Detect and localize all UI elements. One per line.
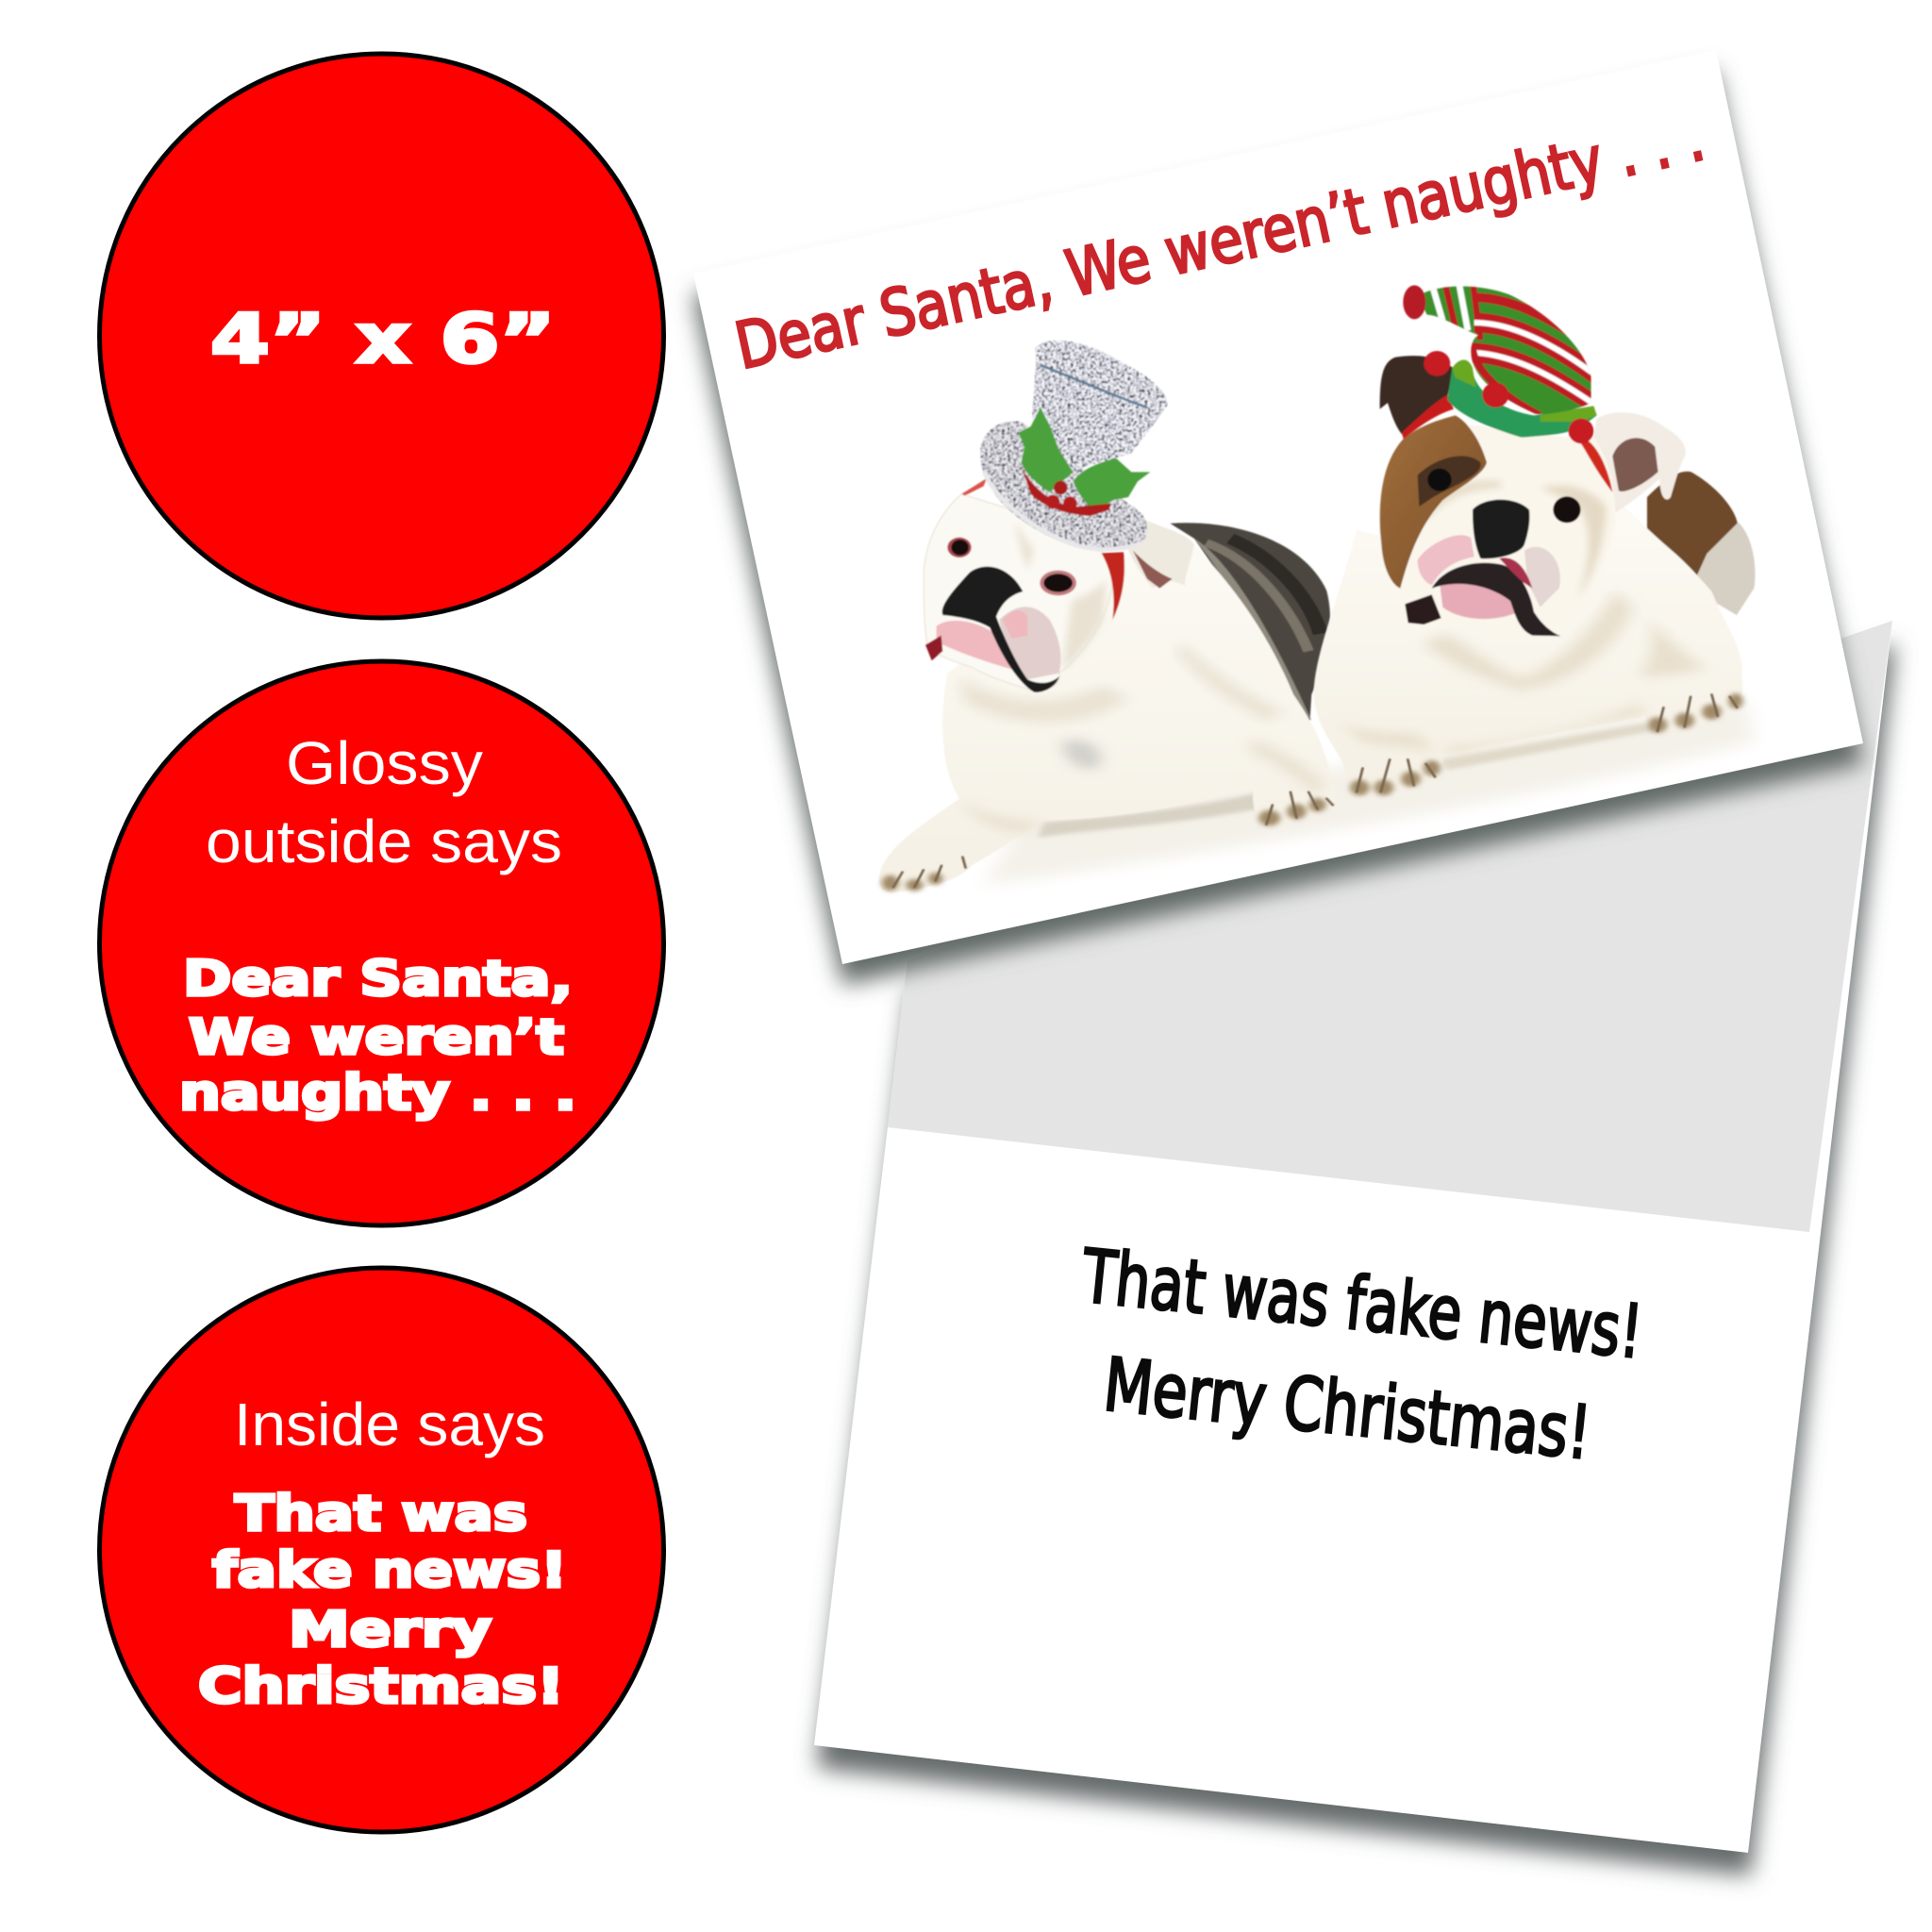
- inside message text: That was fake news!: [1077, 1234, 1646, 1375]
- left dog nose and mouth: [942, 567, 1059, 692]
- top hat: [980, 341, 1168, 551]
- right dog muzzle: [1418, 535, 1474, 585]
- brown face patch: [1380, 415, 1487, 589]
- dark far ear: [1380, 356, 1454, 436]
- inside message text: [1077, 1234, 1646, 1476]
- left dog muzzle: [937, 621, 1015, 670]
- hat tip stripes: [1432, 280, 1480, 340]
- left dog face shading: [1015, 523, 1107, 670]
- right dog face shading: [1421, 481, 1607, 598]
- inside label: Inside says: [234, 1391, 545, 1458]
- right dog nose and mouth: [1473, 500, 1529, 558]
- circle: inside says: [100, 1268, 664, 1832]
- inside message: That was: [235, 1486, 527, 1542]
- inside message: Merry: [289, 1602, 491, 1658]
- right dog head: [1380, 280, 1686, 636]
- fold: grey upper panel: [888, 621, 1892, 1232]
- dog: left bulldog with top hat: [879, 341, 1336, 892]
- left dog ear: [1128, 519, 1194, 589]
- outside label: [206, 729, 562, 875]
- right red bands: [1402, 395, 1454, 439]
- right dog ear: [1593, 412, 1686, 513]
- hat main stripes: [1468, 297, 1597, 415]
- front headline: Dear Santa, We weren’t naughty . . .: [729, 101, 1711, 385]
- holly leaves: [1018, 408, 1074, 492]
- left dog fur shading: [959, 642, 1326, 833]
- outside message: [179, 951, 576, 1122]
- left dog head: [924, 341, 1194, 692]
- photo: floor shadow: [984, 703, 1754, 885]
- left dog eyes: [947, 538, 972, 558]
- front of card: [693, 50, 1863, 985]
- red ribbon and berries: [1022, 466, 1111, 516]
- left dog body: [879, 523, 1336, 892]
- circle: size 4 x 6: [100, 54, 664, 618]
- outside message: naughty . . .: [179, 1065, 576, 1122]
- inside message: [198, 1486, 567, 1715]
- right dog paws: [1350, 693, 1743, 795]
- right dog eyes: [1427, 469, 1452, 491]
- striped cone: [1423, 285, 1592, 415]
- outside message: Dear Santa,: [183, 951, 573, 1008]
- size text: 4” x 6”: [210, 299, 556, 378]
- circle: glossy outside says: [100, 661, 664, 1225]
- inside of card: [814, 621, 1895, 1875]
- pompom and hat balls: [1403, 285, 1425, 319]
- outside label: Glossy: [286, 729, 483, 797]
- right dog body: [1314, 504, 1743, 795]
- outside label: outside says: [206, 808, 562, 875]
- dog: right bulldog with elf hat: [1314, 280, 1755, 795]
- elf hat: [1403, 280, 1597, 443]
- right dog fur shading: [1339, 591, 1706, 755]
- left dog paws: [882, 792, 1333, 891]
- left dog red strap: [1102, 552, 1124, 620]
- right dog back: [1647, 472, 1755, 615]
- inside message text: Merry Christmas!: [1100, 1342, 1595, 1476]
- inside message: Christmas!: [198, 1658, 564, 1715]
- inside message: fake news!: [212, 1542, 567, 1599]
- outside message: We weren’t: [189, 1009, 564, 1066]
